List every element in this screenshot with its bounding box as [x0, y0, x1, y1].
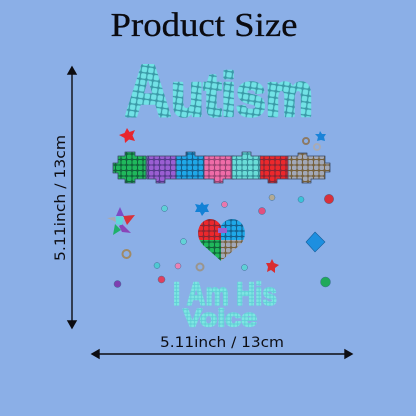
puzzle piece: blue — [176, 152, 206, 179]
label: height: 5.11inch / 13cm — [53, 135, 69, 261]
puzzle piece: red — [260, 156, 292, 183]
scattered stones — [114, 194, 334, 288]
title: Product Size — [110, 7, 298, 44]
ring stones top — [303, 138, 320, 150]
product size infographic — [54, 12, 354, 360]
puzzle piece: teal — [232, 152, 261, 179]
rhinestone word: Autism: Autism — [125, 52, 313, 132]
puzzle piece: purple — [147, 156, 180, 183]
heart: puzzle — [198, 219, 245, 261]
puzzle piece: green — [113, 152, 146, 183]
star: blue center — [195, 202, 209, 216]
diamond: blue — [306, 232, 325, 252]
rhinestone text: I Am His Voice: I Am His — [173, 276, 277, 312]
star: red lower — [266, 259, 279, 273]
puzzle band — [113, 152, 330, 183]
star: red top — [119, 128, 135, 143]
arrow: horizontal dimension — [92, 350, 352, 358]
rhinestone text: I Am His Voice — [173, 276, 277, 332]
puzzle piece: tan — [288, 153, 330, 183]
puzzle piece: pink — [204, 156, 234, 183]
arrow: vertical dimension — [68, 67, 76, 328]
label: width: 5.11inch / 13cm — [160, 335, 284, 351]
star: blue top — [315, 131, 326, 141]
star: multicolor — [107, 207, 135, 235]
rhinestone text: I Am His Voice: Voice — [183, 304, 257, 332]
